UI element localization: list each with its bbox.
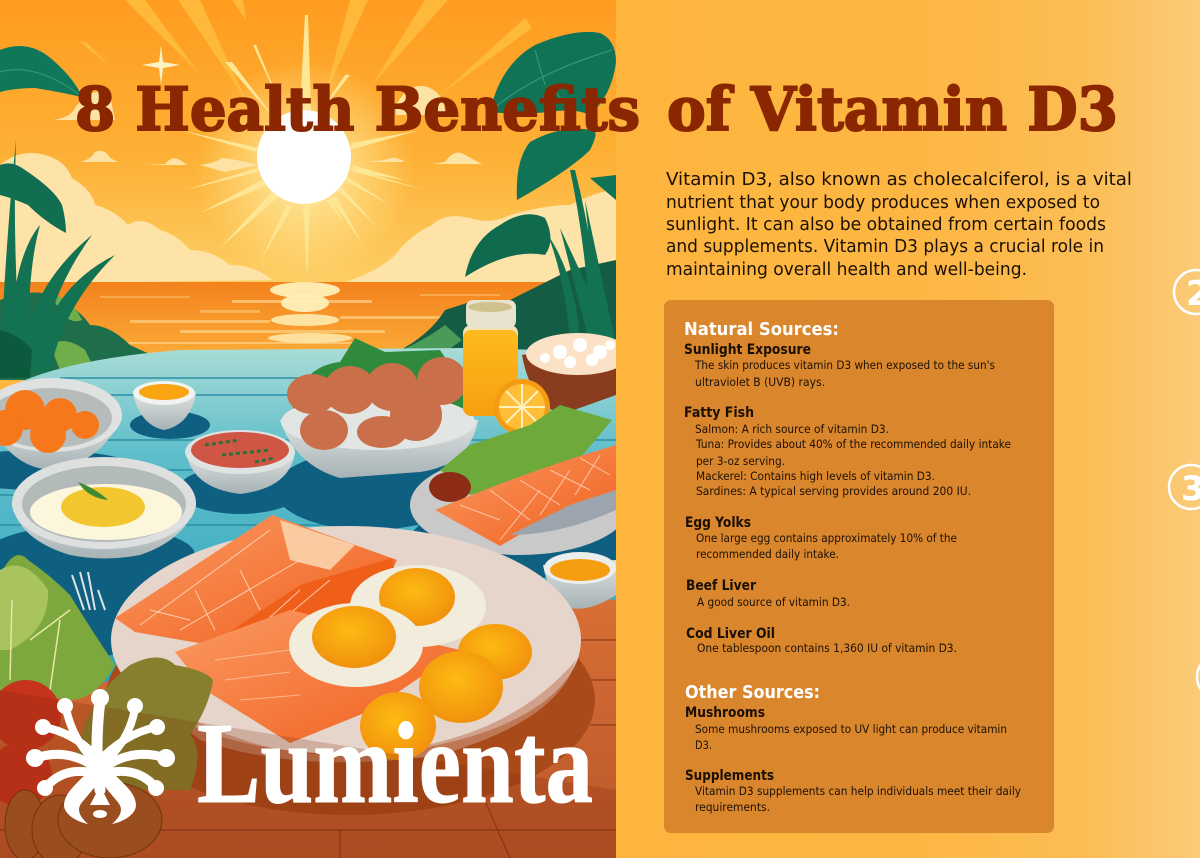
egg yolks: One large egg contains approximately 10% of the: [696, 531, 957, 545]
supplements: Vitamin D3 supplements can help individuals meet their daily: [695, 784, 1021, 798]
fatty fish: Sardines: A typical serving provides around 200 IU.: [696, 484, 971, 498]
supplements: requirements.: [695, 800, 770, 814]
fine sun beams: [180, 15, 425, 278]
fried egg front: [289, 603, 423, 687]
chunks bowl: [522, 333, 616, 410]
fatty fish: [684, 405, 1011, 498]
loose yolks: [360, 624, 532, 760]
juice jar: [463, 300, 518, 416]
fork: [72, 572, 105, 610]
small orange bowl: [543, 552, 616, 609]
orange slice: [494, 379, 550, 435]
egg yolks: Egg Yolks: [685, 515, 751, 531]
grass right: [548, 170, 616, 345]
table shadows: [0, 411, 650, 660]
title: 8 Health Benefits: [75, 75, 640, 145]
fatty fish: Mackerel: Contains high levels of vitamin D3.: [696, 469, 935, 483]
mushrooms: D3.: [695, 738, 712, 752]
cod liver oil: [686, 626, 957, 655]
bush left highlight: [54, 296, 91, 369]
mushrooms: Mushrooms: [685, 705, 765, 721]
plate shadow: [106, 658, 595, 815]
title: of Vitamin D3: [667, 75, 1118, 145]
fatty fish: per 3-oz serving.: [696, 454, 785, 468]
olive lettuce: [75, 658, 213, 790]
title: [75, 75, 1118, 145]
cod liver oil: One tablespoon contains 1,360 IU of vitamin D3.: [697, 641, 957, 655]
sun rays: [80, 0, 532, 100]
intro paragraph: Vitamin D3, also known as cholecalciferol, is a vital: [666, 169, 1132, 190]
bowl with eggs: [280, 338, 478, 478]
water reflection: [100, 282, 500, 344]
panel: sources: [664, 300, 1054, 833]
rice bowl: [12, 457, 196, 558]
logo wordmark: Lumienta: [197, 700, 593, 828]
table top: [0, 348, 616, 700]
small yolk bowl: [133, 381, 196, 430]
numbered circle 2: [1174, 270, 1200, 314]
fatty fish: Salmon: A rich source of vitamin D3.: [695, 422, 889, 436]
table plank lines: [0, 378, 616, 525]
egg yolks: recommended daily intake.: [696, 547, 839, 561]
sea: [0, 282, 546, 353]
egg yolks: [685, 515, 957, 561]
intro paragraph: maintaining overall health and well-being.: [666, 259, 1027, 280]
bush right highlight: [405, 325, 462, 348]
intro paragraph: nutrient that your body produces when exposed to: [666, 192, 1100, 213]
beef liver: [686, 578, 850, 609]
sunlight exposure: [684, 342, 995, 389]
wood plank lines: [0, 640, 616, 858]
large clouds left: [0, 153, 272, 284]
kiwi slices: [5, 782, 162, 858]
wooden table: [0, 592, 616, 858]
small clouds: [53, 86, 482, 172]
heading: natural sources: Natural Sources:: [684, 319, 839, 340]
leaf mid left: [0, 163, 66, 233]
sunlight exposure: The skin produces vitamin D3 when exposed to the sun's: [694, 358, 995, 372]
large clouds right: [346, 190, 616, 285]
red sauce bowl: [185, 430, 295, 494]
sun glow: [204, 68, 406, 266]
salmon plate right: [410, 405, 630, 555]
numbered circle 3: [1169, 465, 1200, 509]
plate lower tint: [140, 660, 576, 762]
salmon fillet bottom: [175, 610, 460, 743]
bush right: [395, 260, 616, 355]
leaf top right: [490, 32, 616, 115]
intro paragraph: and supplements. Vitamin D3 plays a crucial role in: [666, 236, 1104, 257]
tomatoes: [0, 680, 61, 807]
illustration: sunset and food table: [0, 0, 650, 858]
leaf lower right: [465, 214, 550, 277]
fatty fish: Fatty Fish: [684, 405, 754, 421]
sun disc: [257, 110, 351, 204]
fatty fish: Tuna: Provides about 40% of the recommended daily intake: [695, 437, 1011, 451]
grass left: [0, 140, 115, 378]
right background panel: [616, 0, 1200, 858]
beef liver: A good source of vitamin D3.: [697, 595, 850, 609]
supplements: [685, 768, 1021, 814]
lettuce left: [0, 555, 115, 700]
leaf top left: [0, 46, 82, 97]
sparkle star: [142, 45, 180, 85]
sky: [0, 0, 616, 290]
supplements: Supplements: [685, 768, 774, 784]
mushrooms: Some mushrooms exposed to UV light can produce vitamin: [695, 722, 1007, 736]
numbered circle 4, cropped at edge: [1197, 655, 1200, 699]
sunlight exposure: ultraviolet B (UVB) rays.: [695, 375, 825, 389]
mushrooms: [685, 705, 1007, 752]
intro paragraph: sunlight. It can also be obtained from certain foods: [666, 214, 1106, 235]
cod liver oil: Cod Liver Oil: [686, 626, 775, 642]
beef liver: Beef Liver: [686, 578, 756, 594]
bush left: [0, 292, 158, 380]
big plate: [111, 526, 581, 754]
logo icon: [26, 689, 175, 824]
oranges bowl: [0, 378, 122, 470]
sunlight exposure: Sunlight Exposure: [684, 342, 811, 358]
intro paragraph: [666, 169, 1132, 280]
heading: other sources: Other Sources:: [685, 682, 820, 703]
leaf mid right: [517, 129, 596, 200]
fried egg back: [350, 565, 486, 647]
darkening behind logo: [0, 690, 616, 858]
logo: Lumienta: [26, 689, 593, 828]
leaf far right: [590, 175, 616, 200]
salmon fillet top: [115, 515, 397, 645]
